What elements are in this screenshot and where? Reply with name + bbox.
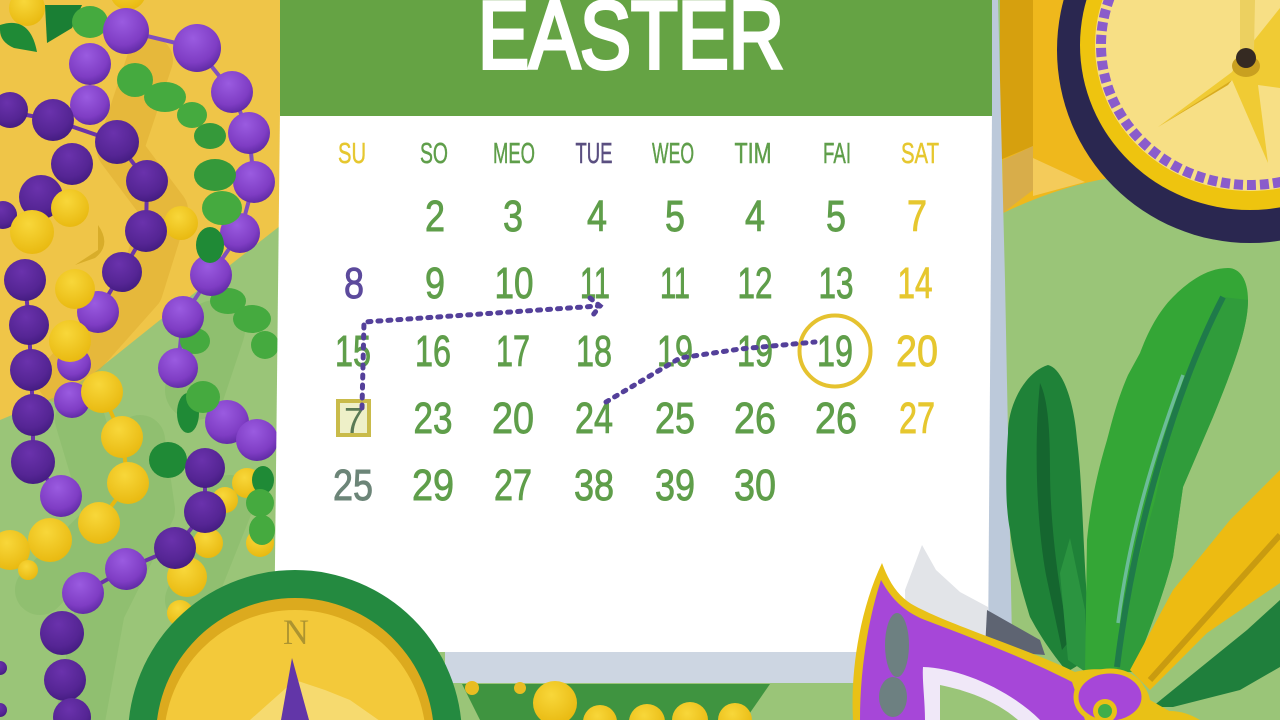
calendar side edge: [985, 0, 1012, 640]
compass letter N: N: [283, 612, 309, 652]
weekday labels: SAT: [901, 138, 939, 170]
calendar dates: 39: [655, 461, 695, 510]
calendar dates: 17: [496, 327, 530, 376]
weekday labels: TIM: [734, 138, 772, 170]
bead shadows: [40, 60, 230, 720]
calendar dates: 15: [335, 327, 371, 376]
calendar dates: 30: [734, 461, 776, 510]
calendar dates: 11: [660, 259, 690, 308]
dark purple beads: [0, 92, 226, 720]
weekday labels: SO: [420, 138, 448, 170]
mask body: [853, 563, 1185, 720]
calendar dates: 14: [898, 259, 932, 308]
calendar dates: 5: [665, 192, 685, 241]
calendar dates: 19: [817, 327, 853, 376]
calendar dates: 4: [587, 192, 607, 241]
calendar dates: 23: [414, 394, 452, 443]
calendar dates: 8: [344, 259, 364, 308]
calendar dates: [333, 192, 938, 510]
weekday labels: SU: [338, 138, 366, 170]
highlighted start square: 7: [344, 400, 364, 441]
calendar dates: 13: [818, 259, 854, 308]
calendar header: [280, 0, 992, 116]
calendar dates: 18: [576, 327, 612, 376]
panel: wall calendar: [274, 0, 1012, 683]
back yellow beads: [9, 0, 274, 626]
calendar dates: 38: [574, 461, 614, 510]
purple beads: [40, 8, 278, 614]
calendar dates: 29: [412, 461, 454, 510]
compass star: [1158, 8, 1280, 163]
feather yellow: [1130, 470, 1280, 690]
yellow beads bottom centre: [462, 681, 770, 720]
calendar dates: 3: [503, 192, 523, 241]
bead necklaces: [0, 0, 279, 720]
weekday labels: [338, 138, 939, 170]
compass top right: [1057, 0, 1280, 243]
calendar dates: 4: [745, 192, 765, 241]
front yellow beads: [0, 189, 149, 580]
carnival mask: [853, 563, 1200, 720]
calendar dates: 26: [815, 394, 857, 443]
calendar dates: 25: [333, 461, 373, 510]
calendar dates: 16: [415, 327, 451, 376]
calendar dates: 19: [737, 327, 773, 376]
circled date: [800, 316, 870, 386]
highlighted start square: [338, 400, 369, 441]
mask medallion: [1076, 671, 1144, 720]
calendar dates: 12: [738, 259, 772, 308]
compass bottom left: [128, 570, 462, 720]
front green beads: [186, 159, 242, 413]
feather main: [1085, 268, 1248, 673]
feather dark left: [1006, 365, 1087, 672]
calendar dates: 7: [907, 192, 927, 241]
calendar dates: 27: [494, 461, 532, 510]
weekday labels: WEO: [652, 138, 694, 170]
dotted route 2: [606, 342, 815, 402]
weekday labels: TUE: [576, 138, 612, 170]
feather dark lower: [1152, 600, 1280, 707]
calendar dates: 10: [494, 259, 534, 308]
feathers: [1006, 268, 1280, 707]
back green beads: [0, 5, 279, 545]
mask wing: [985, 610, 1045, 655]
bead strands: [0, 31, 254, 593]
calendar bottom edge: [445, 650, 857, 683]
compass pivot: [1236, 48, 1256, 68]
calendar dates: 25: [655, 394, 695, 443]
page fold: [905, 545, 988, 650]
mask eye: [923, 667, 1040, 720]
calendar dates: 20: [492, 394, 534, 443]
calendar page: [274, 110, 992, 652]
dotted route 1: [362, 298, 600, 408]
calendar dates: 26: [734, 394, 776, 443]
calendar dates: 27: [899, 394, 935, 443]
calendar dates: 11: [580, 259, 610, 308]
weekday labels: FAI: [823, 138, 851, 170]
compass needle: [281, 658, 309, 720]
calendar dates: 19: [657, 327, 693, 376]
weekday labels: MEO: [493, 138, 535, 170]
calendar dates: 9: [425, 259, 445, 308]
calendar dates: 5: [826, 192, 846, 241]
mask ornaments: [885, 613, 909, 677]
calendar dates: 24: [575, 394, 613, 443]
calendar dates: 2: [425, 192, 445, 241]
calendar dates: 20: [896, 327, 938, 376]
